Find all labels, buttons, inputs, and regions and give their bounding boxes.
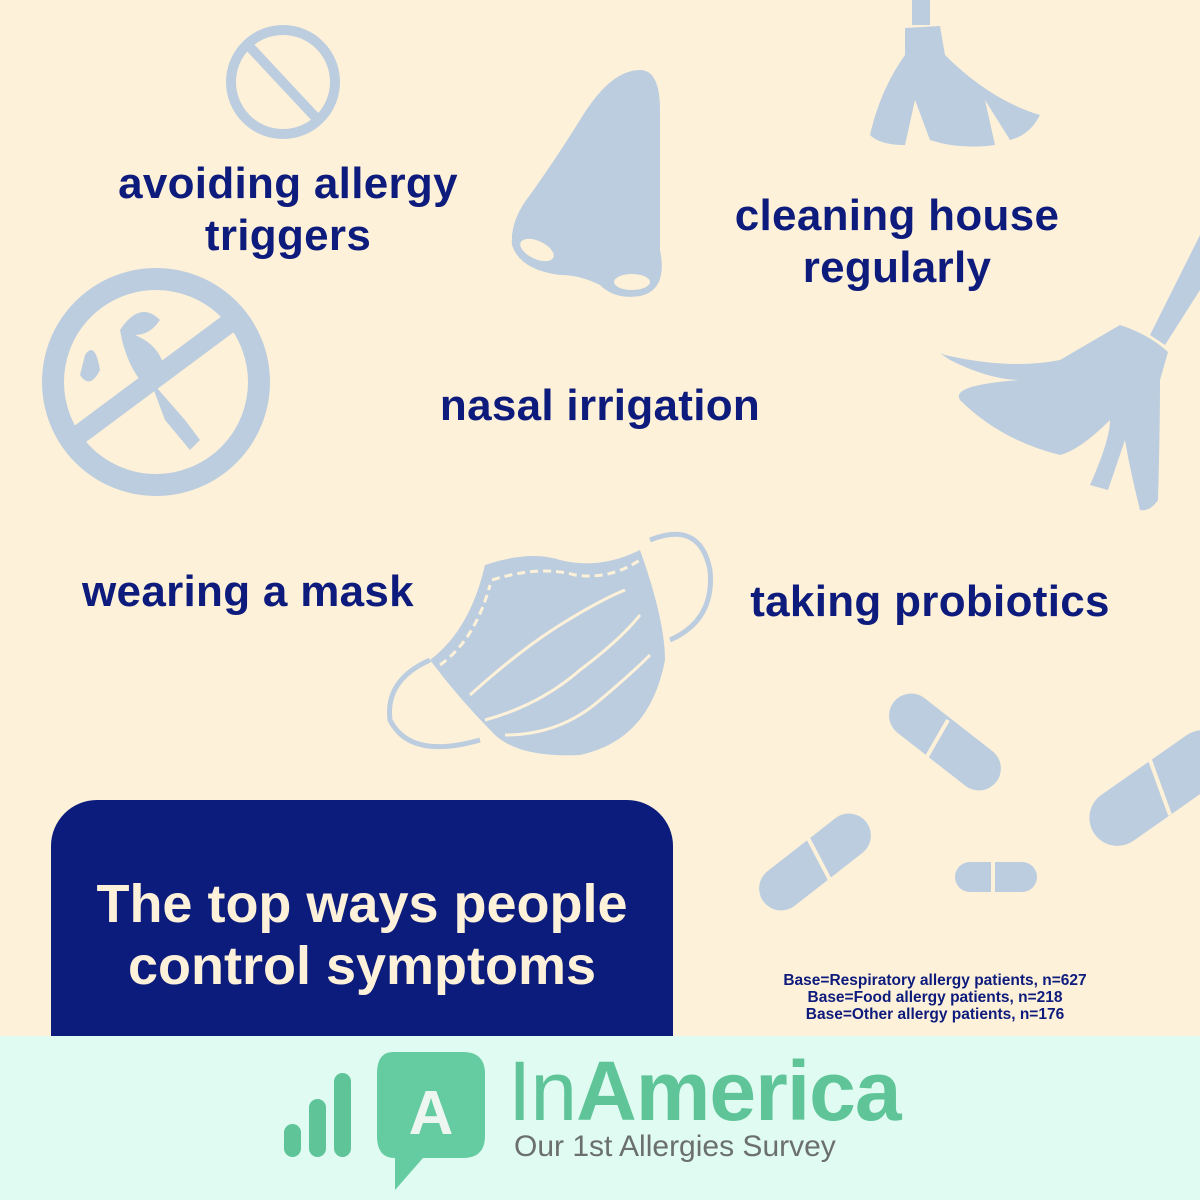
wordmark: InAmerica: [508, 1044, 901, 1138]
icon: broom big: [941, 235, 1200, 510]
footer: [0, 1036, 1200, 1200]
title box: [51, 800, 673, 1040]
text: taking probiotics: taking probiotics: [750, 577, 1110, 626]
title: control symptoms: [128, 936, 596, 996]
icon: speech bubble A: [377, 1052, 485, 1190]
subtitle: Our 1st Allergies Survey: [514, 1130, 836, 1163]
base notes: Base=Respiratory allergy patients, n=627: [783, 972, 1087, 989]
icon: prohibition sign small: [231, 30, 335, 134]
icon: mask: [390, 534, 710, 755]
base notes: Base=Other allergy patients, n=176: [806, 1006, 1064, 1023]
base notes: Base=Food allergy patients, n=218: [808, 989, 1062, 1006]
text: avoiding allergy triggers: triggers: [205, 211, 371, 260]
icon: broom top: [870, 0, 1040, 147]
text: avoiding allergy triggers: [118, 159, 458, 260]
text: wearing a mask: wearing a mask: [82, 567, 414, 616]
icon: pills: [750, 685, 1200, 919]
text: cleaning house regularly: regularly: [803, 243, 991, 292]
icon: speech bubble A: A: [409, 1079, 453, 1148]
base notes: [783, 972, 1087, 1023]
title: [96, 874, 628, 996]
logo: [284, 1044, 902, 1190]
text: cleaning house regularly: cleaning house: [735, 191, 1059, 240]
title: The top ways people: [96, 874, 628, 934]
icon: nose: [512, 70, 662, 297]
icon: no lobster sign: [53, 279, 259, 485]
text: avoiding allergy triggers: avoiding allergy: [118, 159, 458, 208]
icon: signal bars: [284, 1073, 351, 1157]
text: nasal irrigation: nasal irrigation: [440, 381, 760, 430]
text: cleaning house regularly: [735, 191, 1059, 292]
